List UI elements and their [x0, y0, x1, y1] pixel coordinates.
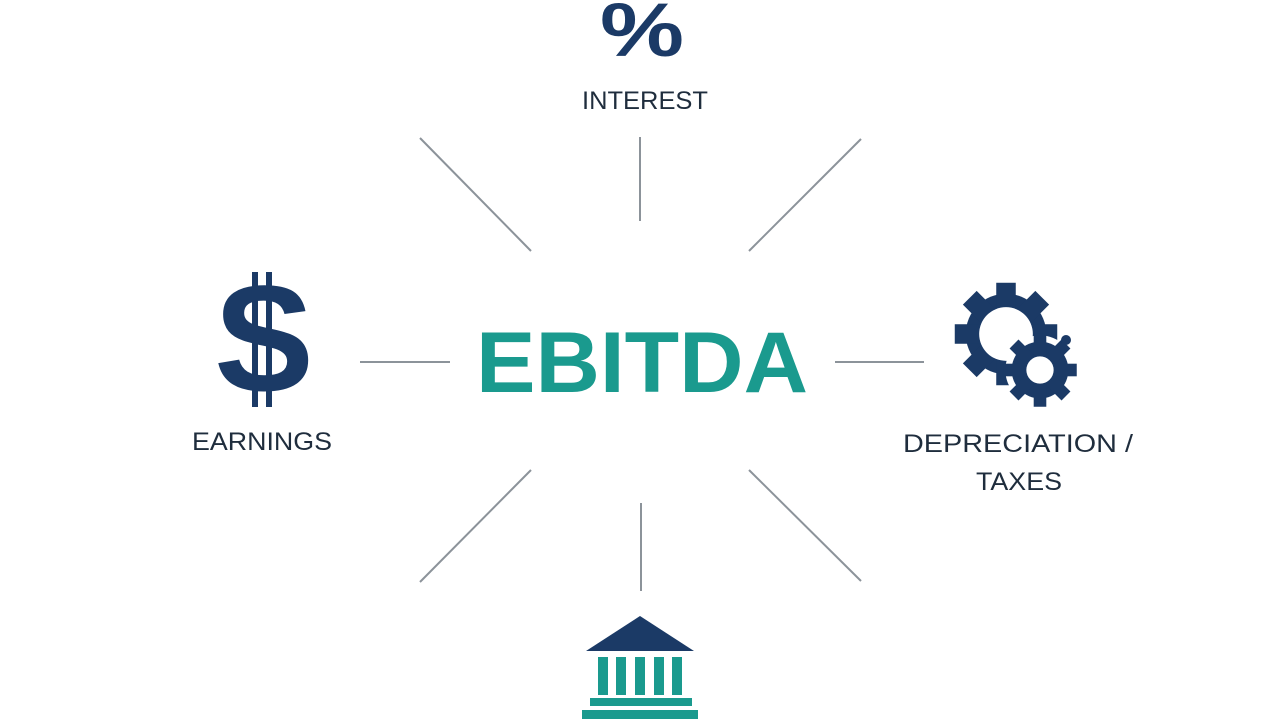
icon: dollar: S [214, 254, 314, 422]
label: earnings: EARNINGS [192, 428, 332, 456]
icon: gears [955, 283, 1077, 407]
label: depreciation taxes: TAXES [976, 468, 1062, 496]
label: depreciation taxes [903, 430, 1133, 496]
title: EBITDA [476, 315, 808, 411]
label: interest: INTEREST [582, 87, 708, 115]
label: depreciation taxes: DEPRECIATION / [903, 430, 1133, 458]
icon: bank [582, 616, 698, 719]
